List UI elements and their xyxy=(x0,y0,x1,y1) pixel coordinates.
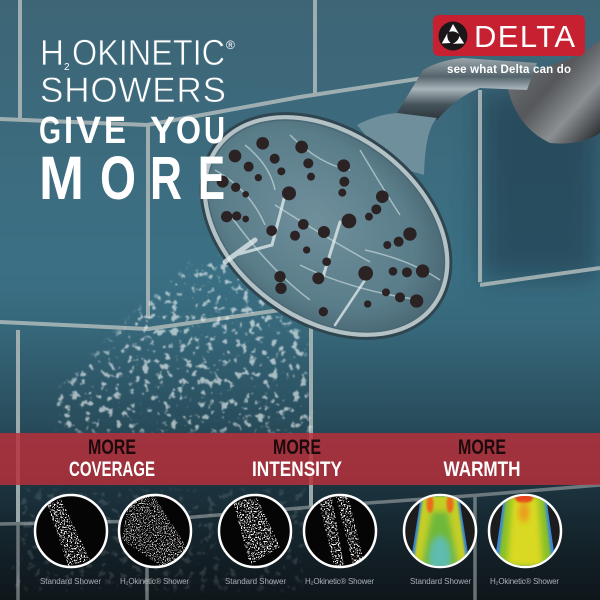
caption: standard shower 1: Standard Shower xyxy=(40,577,101,586)
title line: give you: U xyxy=(204,110,225,152)
title line: more: E xyxy=(198,144,225,212)
title line: more: M xyxy=(39,144,84,212)
title line: give you: V xyxy=(76,110,102,152)
circle: standard intensity xyxy=(219,495,291,567)
circle: H2Okinetic coverage xyxy=(119,490,195,572)
title line: give you: G xyxy=(39,110,61,152)
caption: H2Okinetic shower 2: H₂Okinetic® Shower xyxy=(305,577,374,586)
title line: more: R xyxy=(150,144,182,212)
title line: give you: Y xyxy=(150,110,175,152)
caption: H2Okinetic shower 3: H₂Okinetic® Shower xyxy=(490,577,559,586)
benefit heading: intensity xyxy=(252,436,342,481)
title: ® xyxy=(226,38,235,52)
title xyxy=(39,32,235,212)
title line: more xyxy=(39,144,225,212)
red banner xyxy=(0,433,600,485)
title line: H2Okinetic: SHOWERS xyxy=(40,71,226,110)
title line: give you: O xyxy=(176,110,201,152)
title line: give you: E xyxy=(104,110,126,152)
benefit heading: coverage: MORE xyxy=(88,436,136,459)
face petals and water streaks xyxy=(215,135,440,300)
caption: standard shower 2: Standard Shower xyxy=(225,577,286,586)
title line: H2Okinetic: OKINETIC xyxy=(72,32,225,73)
circle: standard warmth heat map xyxy=(404,495,476,580)
circle: standard coverage xyxy=(35,495,107,567)
benefit heading: warmth: MORE xyxy=(458,436,506,459)
nozzle holes xyxy=(217,137,429,316)
caption: H2Okinetic shower 1: H₂Okinetic® Shower xyxy=(120,577,189,586)
benefit heading: coverage xyxy=(69,436,155,481)
shower arm and wall flange xyxy=(357,40,600,175)
Delta logo: DELTA xyxy=(474,19,575,54)
water spray xyxy=(12,254,314,592)
benefit heading: warmth xyxy=(444,436,520,481)
title line: give you xyxy=(39,110,225,152)
Delta logo: see what Delta can do xyxy=(447,64,571,76)
benefit heading: coverage: COVERAGE xyxy=(69,458,155,481)
shower head xyxy=(156,65,496,387)
caption: standard shower 3: Standard Shower xyxy=(410,577,471,586)
benefit heading: warmth: WARMTH xyxy=(444,458,520,481)
benefit heading: intensity: INTENSITY xyxy=(252,458,342,481)
benefit heading: intensity: MORE xyxy=(273,436,321,459)
circle: H2Okinetic warmth heat map xyxy=(489,493,561,567)
title: 2 xyxy=(64,62,70,73)
title line: H2Okinetic xyxy=(40,32,226,110)
circle: H2Okinetic intensity xyxy=(304,495,376,570)
title line: give you: I xyxy=(64,110,73,152)
title line: H2Okinetic: H xyxy=(40,32,64,73)
title line: more: O xyxy=(100,144,136,212)
icon: delta triskelion xyxy=(439,24,466,49)
Delta logo xyxy=(433,15,585,76)
